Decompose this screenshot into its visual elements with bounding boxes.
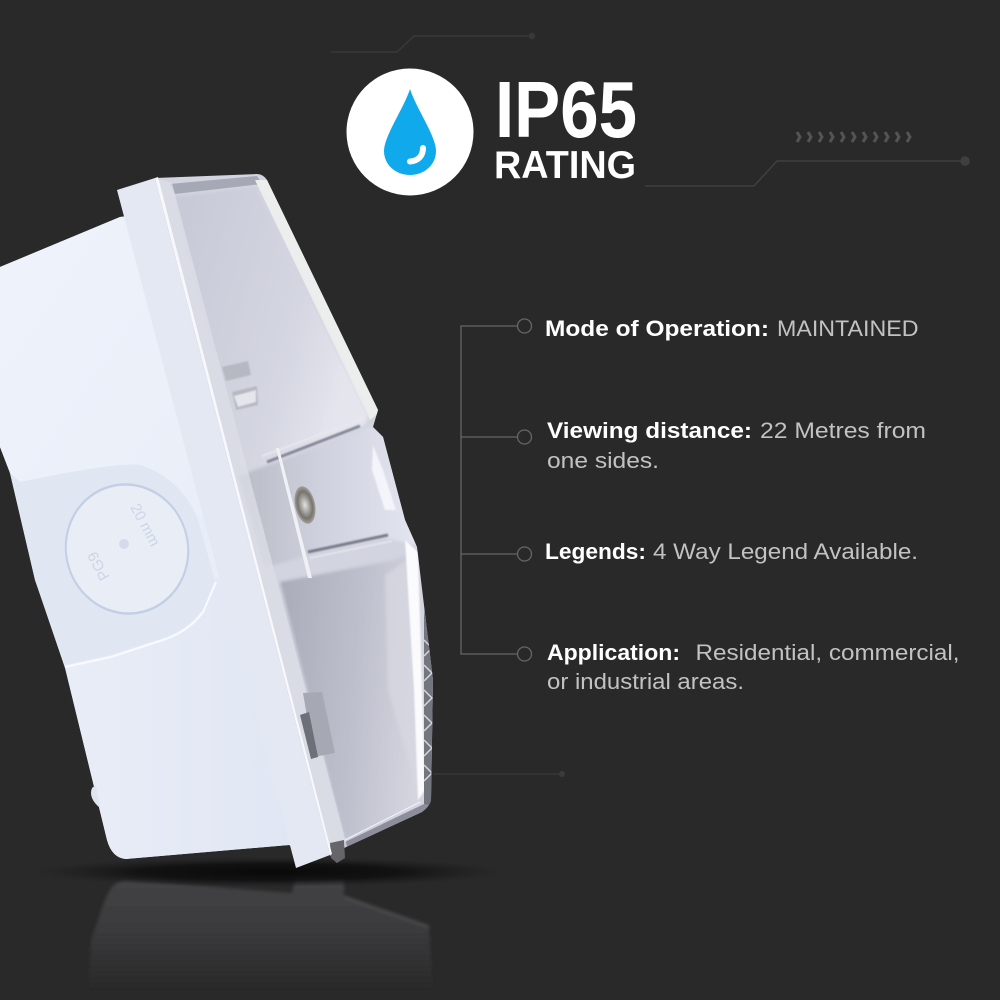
upper ridge white line [262, 442, 298, 456]
decorative circuit line: right [645, 157, 969, 186]
rear body bump [91, 785, 100, 808]
text: legends [545, 539, 918, 564]
prism ticks [424, 640, 432, 781]
lens rear rim [155, 178, 347, 863]
inner clip detail [222, 361, 258, 410]
lower ridge white line [310, 541, 392, 558]
title: IP65 rating: IP65 [495, 65, 637, 154]
flange [117, 178, 330, 868]
latch [300, 692, 335, 759]
rear body lower block [65, 578, 300, 859]
rear body upper block [0, 216, 205, 517]
text: viewing distance [547, 418, 926, 473]
upper ridge highlight [267, 426, 360, 462]
icon: water drop badge [346, 68, 474, 196]
text: application [547, 640, 960, 694]
lens outer shell [155, 174, 433, 863]
middle clear band [238, 426, 420, 568]
text: application: Application: [547, 640, 680, 665]
title: IP65 rating: RATING [494, 144, 636, 187]
text: mode of operation: MAINTAINED [777, 316, 918, 341]
knockout disc [51, 470, 203, 628]
text: application: Residential, commercial, [696, 640, 960, 665]
lens top rim [170, 176, 262, 194]
text: legends: Legends: [545, 539, 646, 564]
text: viewing distance: 22 Metres from [760, 418, 926, 443]
text: viewing distance: one sides. [547, 448, 659, 473]
text: mode of operation [545, 316, 918, 341]
screw [291, 484, 319, 526]
lens interior shading [155, 176, 436, 863]
inner clip highlight [234, 390, 256, 407]
text: mode of operation: Mode of Operation: [545, 316, 769, 341]
lower ridge highlight [308, 535, 388, 552]
product reflection [89, 875, 433, 990]
lower lens bright edge [405, 540, 425, 800]
feature connector tree [461, 319, 532, 661]
chevron row [797, 132, 910, 142]
lens bottom white line [345, 802, 420, 840]
product: white LED emergency light housing [0, 174, 436, 868]
text: viewing distance: Viewing distance: [547, 418, 752, 443]
lower lens prism texture [386, 564, 406, 708]
text: legends: 4 Way Legend Available. [653, 539, 918, 564]
lens clamp foot [330, 840, 345, 863]
rear body silhouette [0, 215, 300, 859]
upper lens pane [176, 195, 368, 452]
lens upper bright edge [255, 180, 382, 420]
title: IP65 rating [494, 65, 637, 187]
text: application: or industrial areas. [547, 669, 744, 694]
collar crease [65, 582, 216, 667]
floor shadow [35, 857, 505, 887]
lens seam strip [276, 448, 312, 578]
leader line under product [433, 772, 564, 776]
lens bottom edge [345, 804, 429, 848]
prismatic edge [424, 610, 433, 806]
flange inner edge shading [155, 177, 332, 855]
knockout disc: PG9 [84, 549, 114, 583]
middle band white reflection [372, 445, 396, 510]
knockout disc: 20 mm [126, 501, 163, 549]
mounting collar [10, 465, 215, 665]
lower lens pane [280, 560, 403, 839]
decorative circuit line: top [331, 34, 534, 52]
